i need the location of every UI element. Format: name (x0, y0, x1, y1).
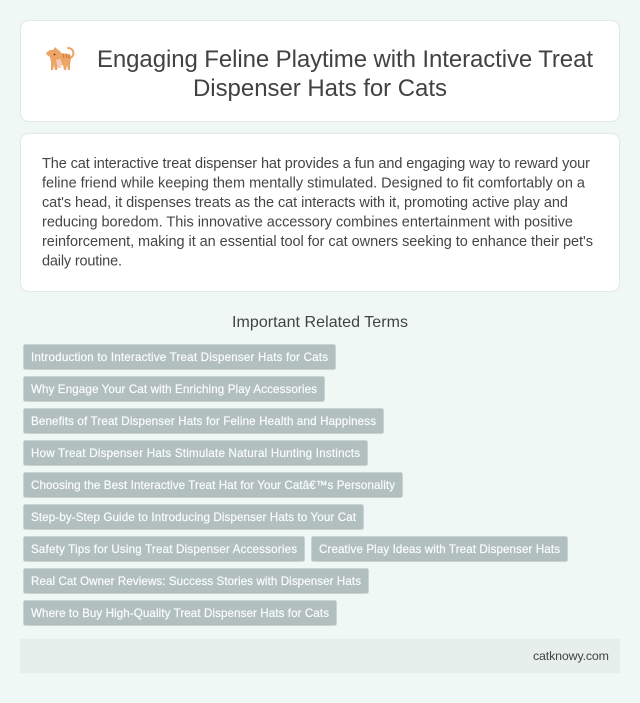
title text (97, 46, 593, 102)
tag 2: Why Engage Your Cat with Enriching Play Accessories (31, 383, 317, 396)
tag 5 (24, 472, 402, 498)
panel: description: reinforcement, making it an essential tool for cat owners seeking to enhance their pet's (42, 234, 593, 250)
panel: description: daily routine. (42, 254, 122, 270)
tag 3 (24, 408, 384, 434)
panel: description: The cat interactive treat dispenser hat provides a fun and engaging way to reward your (42, 156, 590, 172)
tag 6: Step-by-Step Guide to Introducing Dispenser Hats to Your Cat (31, 511, 357, 524)
panel: description: cat's head, it dispenses treats as the cat interacts with it, promoting active play and (42, 195, 568, 211)
tag 10: Where to Buy High-Quality Treat Dispenser Hats for Cats (31, 607, 329, 620)
tag 1 (24, 344, 336, 370)
tag 10 (24, 600, 336, 626)
panel: description (20, 134, 620, 292)
tag 7 (24, 536, 304, 562)
tag 3: Benefits of Treat Dispenser Hats for Feline Health and Happiness (31, 415, 376, 428)
tag 8 (312, 536, 568, 562)
footer (20, 639, 620, 673)
panel: title card (20, 20, 620, 122)
tag 5: Choosing the Best Interactive Treat Hat for Your Catâ€™s Personality (31, 479, 395, 492)
tag 9: Real Cat Owner Reviews: Success Stories with Dispenser Hats (31, 575, 361, 588)
tag list (24, 344, 568, 626)
tag 8: Creative Play Ideas with Treat Dispenser Hats (319, 543, 560, 556)
title text: Engaging Feline Playtime with Interactive Treat (97, 46, 593, 73)
panel: description: feline friend while keeping them mentally stimulated. Designed to fit comfortably on a (42, 176, 586, 192)
tag 9 (24, 568, 368, 594)
tag 7: Safety Tips for Using Treat Dispenser Accessories (31, 543, 297, 556)
heading: related terms: Important Related Terms (232, 314, 408, 331)
tag 6 (24, 504, 364, 530)
tag 1: Introduction to Interactive Treat Dispenser Hats for Cats (31, 351, 328, 364)
tag 2 (24, 376, 324, 402)
tag 4 (24, 440, 368, 466)
footer: catknowy.com (533, 649, 609, 663)
title text: Dispenser Hats for Cats (193, 75, 447, 102)
panel: description: reducing boredom. This innovative accessory combines entertainment with positive (42, 214, 573, 230)
icon: cat (46, 47, 73, 70)
tag 4: How Treat Dispenser Hats Stimulate Natural Hunting Instincts (31, 447, 360, 460)
